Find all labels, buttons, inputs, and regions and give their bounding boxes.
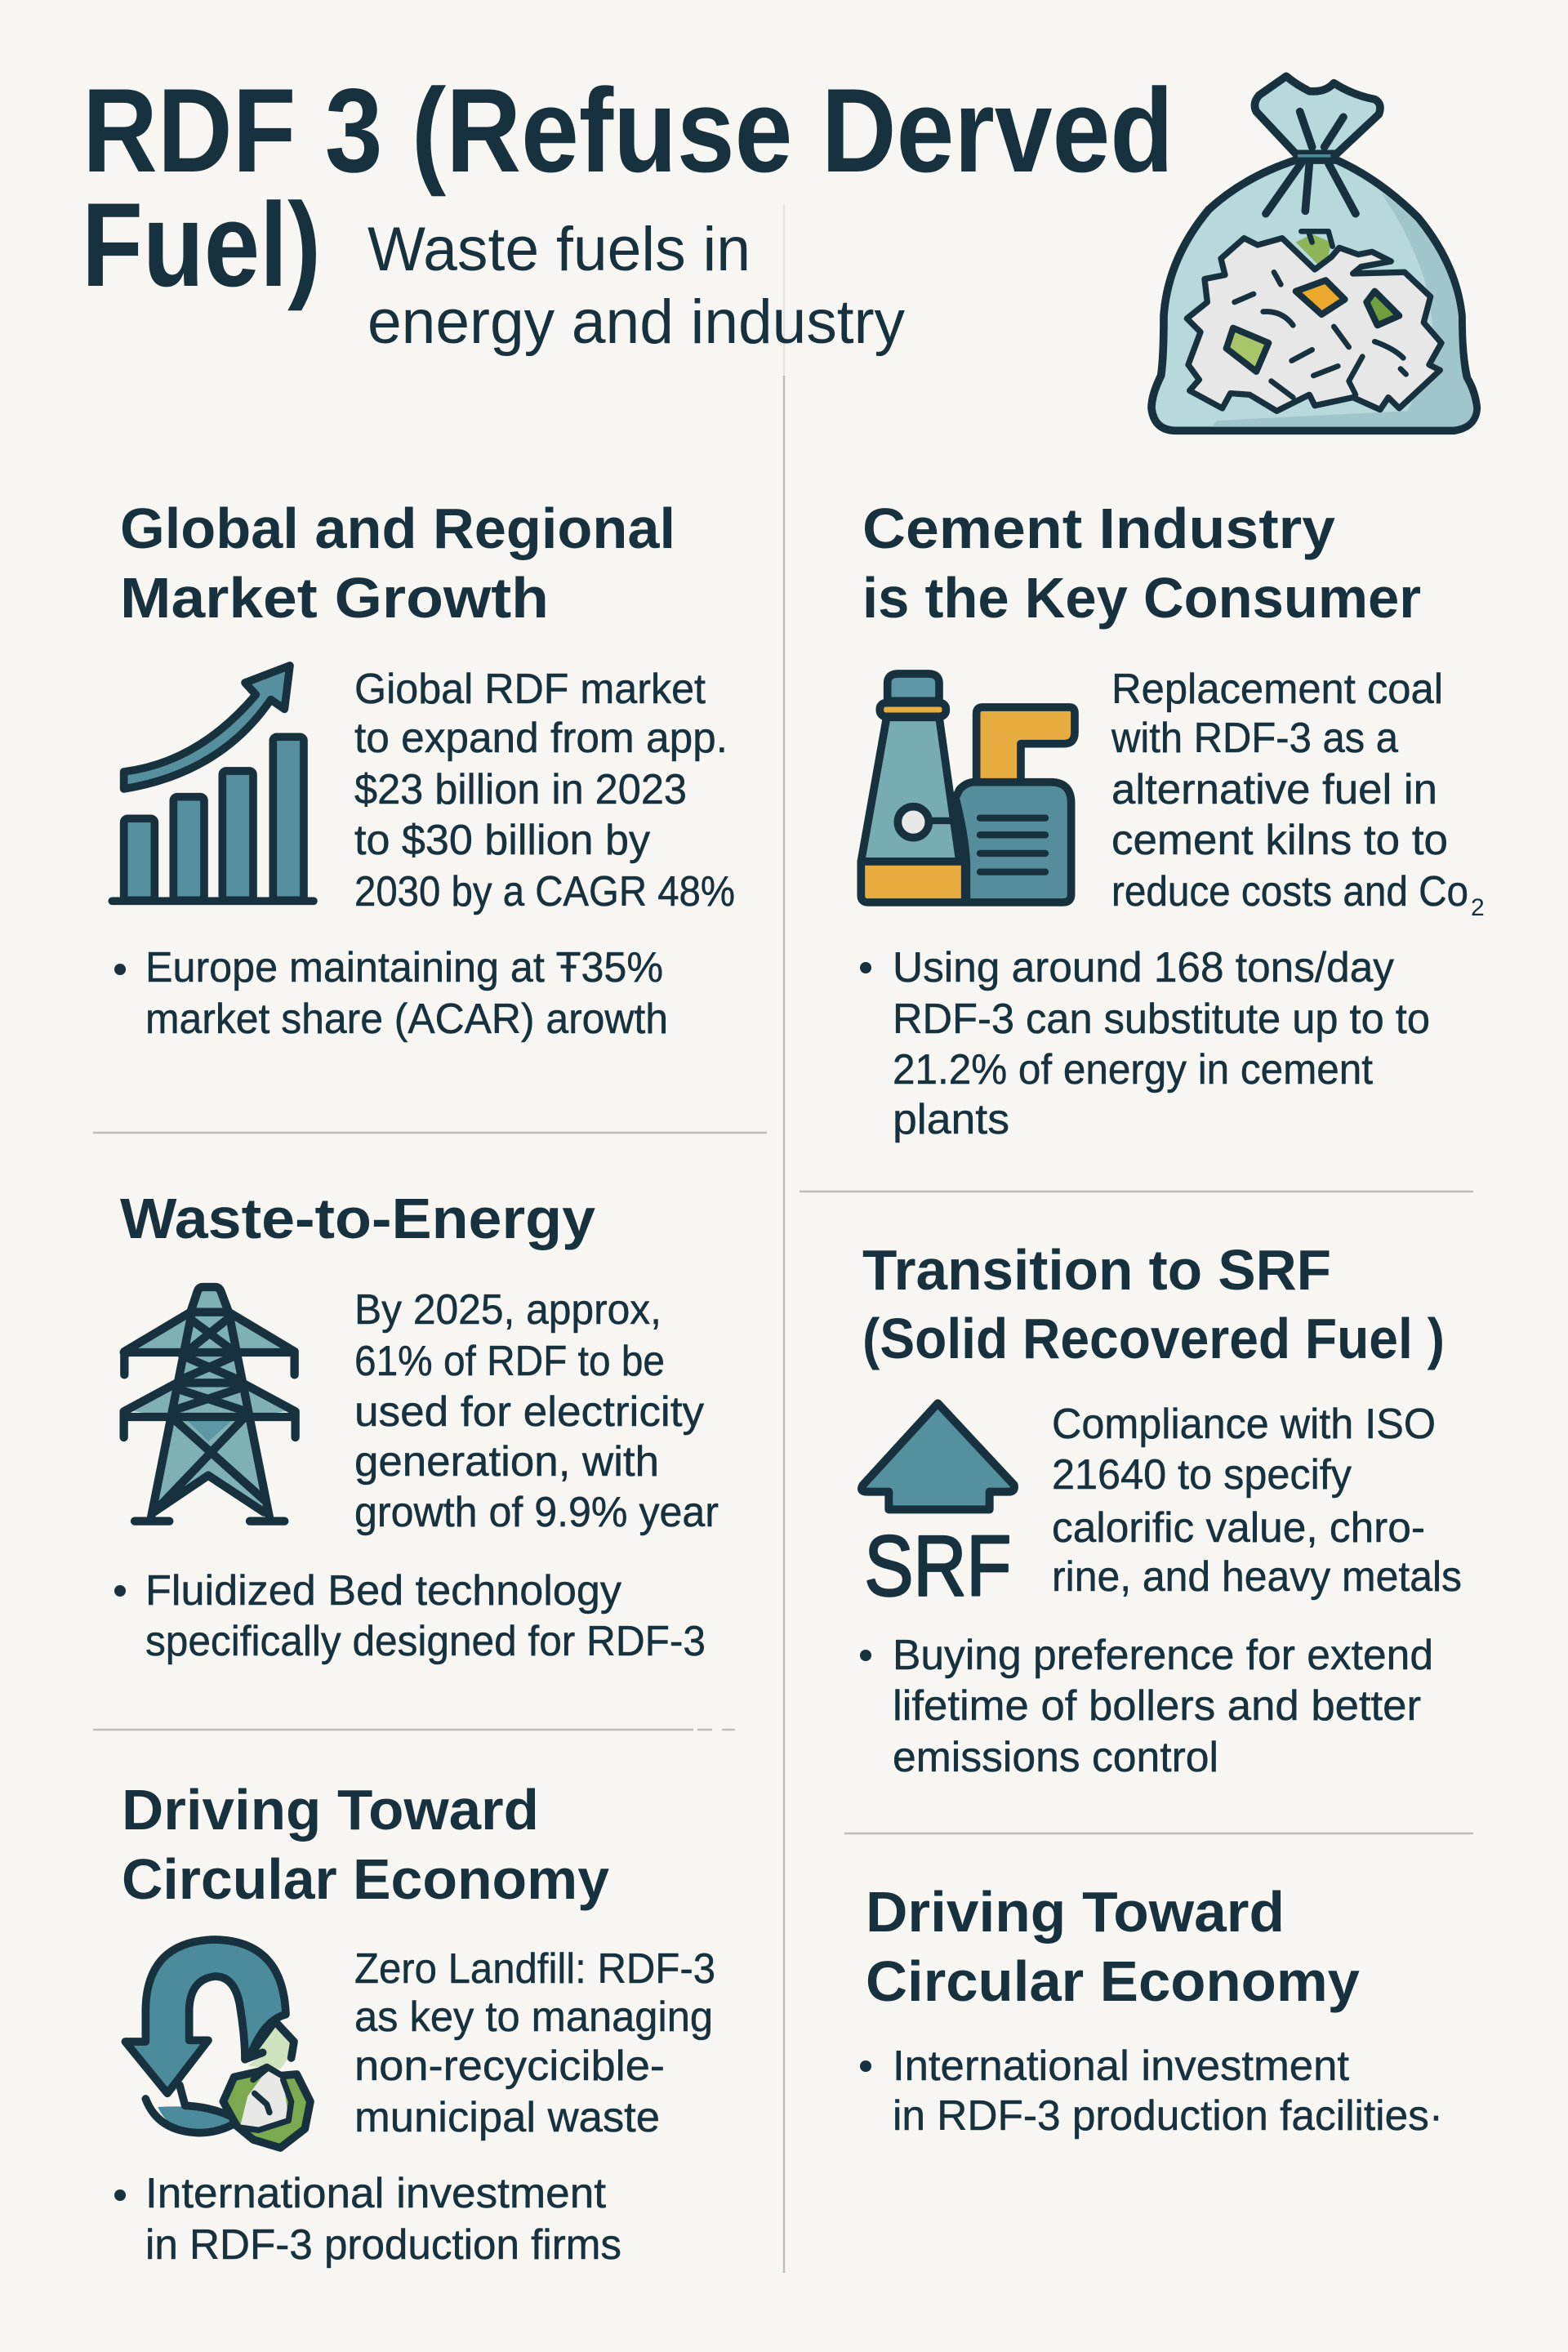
heading: Transition to SRF bbox=[862, 1238, 1331, 1302]
panel: waste-to-energy bbox=[114, 1187, 719, 1665]
title bbox=[82, 64, 1174, 311]
title: Fuel) bbox=[82, 178, 321, 311]
heading bbox=[862, 497, 1421, 630]
title: RDF 3 (Refuse Derved bbox=[82, 64, 1174, 197]
bullet: RDF-3 can substitute up to to bbox=[893, 996, 1430, 1043]
icon: waste bag bbox=[1152, 76, 1477, 430]
body text: rine, and heavy metals bbox=[1052, 1553, 1462, 1601]
bullet: Fluidized Bed technology bbox=[145, 1567, 621, 1615]
bullet bbox=[114, 2170, 621, 2269]
body text bbox=[354, 1286, 719, 1536]
body text: Giobal RDF market bbox=[354, 666, 706, 713]
heading: Circular Economy bbox=[866, 1949, 1360, 2013]
body text: 21640 to specify bbox=[1052, 1451, 1352, 1499]
body text bbox=[1111, 666, 1485, 921]
body text: Compliance with ISO bbox=[1052, 1401, 1436, 1448]
heading: Cement Industry bbox=[862, 497, 1335, 560]
body text bbox=[1052, 1401, 1462, 1601]
panel: driving toward circular economy (right) bbox=[860, 1880, 1443, 2140]
bullet: market share (ACAR) arowth bbox=[145, 996, 668, 1043]
bullet: 21.2% of energy in cement bbox=[893, 1046, 1374, 1094]
body text: alternative fuel in bbox=[1111, 766, 1437, 813]
heading bbox=[120, 497, 675, 630]
bullet: Europe maintaining at Ŧ35% bbox=[145, 944, 663, 991]
subtitle bbox=[368, 215, 905, 357]
panel: global and regional market growth bbox=[112, 497, 735, 1043]
heading: Driving Toward bbox=[122, 1778, 539, 1842]
body text: used for electricity bbox=[354, 1388, 704, 1436]
icon: SRF up arrow: SRF bbox=[864, 1518, 1011, 1614]
subtitle: energy and industry bbox=[368, 287, 905, 357]
subtitle: Waste fuels in bbox=[368, 215, 751, 284]
bullet: Buying preference for extend bbox=[893, 1632, 1433, 1679]
heading bbox=[862, 1238, 1445, 1370]
body text: as key to managing bbox=[354, 1993, 713, 2041]
body text: growth of 9.9% year bbox=[354, 1489, 719, 1536]
icon: growth bar chart with arrow bbox=[112, 666, 314, 901]
body text: $23 billion in 2023 bbox=[354, 766, 687, 813]
body text: Zero Landfill: RDF-3 bbox=[354, 1945, 715, 1993]
bullet bbox=[860, 1632, 1433, 1781]
body text: with RDF-3 as a bbox=[1111, 715, 1398, 762]
panel: transition to SRF bbox=[860, 1238, 1462, 1781]
bullet bbox=[114, 944, 668, 1043]
bullet: International investment bbox=[893, 2042, 1350, 2090]
bullet: in RDF-3 production facilities· bbox=[893, 2092, 1443, 2140]
body text: calorific value, chro- bbox=[1052, 1504, 1425, 1552]
body text bbox=[354, 1945, 715, 2141]
body text: cement kilns to to bbox=[1111, 817, 1448, 864]
bullet: plants bbox=[893, 1096, 1009, 1143]
body text: municipal waste bbox=[354, 2094, 660, 2141]
icon: SRF up arrow bbox=[862, 1403, 1014, 1614]
body text: Replacement coal bbox=[1111, 666, 1443, 713]
bullet: emissions control bbox=[893, 1734, 1218, 1781]
body text: generation, with bbox=[354, 1438, 659, 1486]
panel: cement industry bbox=[860, 497, 1485, 1143]
bullet: specifically designed for RDF-3 bbox=[145, 1618, 706, 1665]
heading: Waste-to-Energy bbox=[120, 1187, 595, 1250]
icon: cement plant bbox=[861, 674, 1075, 902]
body text bbox=[354, 666, 735, 915]
bullet bbox=[114, 1567, 706, 1665]
body text: to expand from app. bbox=[354, 715, 728, 762]
bullet: in RDF-3 production firms bbox=[145, 2221, 621, 2269]
heading: Market Growth bbox=[120, 566, 549, 630]
body text: reduce costs and Co bbox=[1111, 868, 1468, 915]
bullet bbox=[860, 2042, 1443, 2140]
heading: Global and Regional bbox=[120, 497, 675, 560]
bullet: International investment bbox=[145, 2170, 607, 2217]
bullet bbox=[860, 944, 1430, 1143]
heading: Driving Toward bbox=[866, 1880, 1285, 1944]
heading: Circular Economy bbox=[122, 1847, 609, 1911]
body text: to $30 billion by bbox=[354, 817, 650, 864]
heading bbox=[122, 1778, 609, 1911]
body text: 2030 by a CAGR 48% bbox=[354, 868, 735, 915]
panel: driving toward circular economy (left) bbox=[114, 1778, 715, 2269]
body text: non-recycicible- bbox=[354, 2042, 665, 2090]
body text: 61% of RDF to be bbox=[354, 1338, 665, 1385]
body text: 2 bbox=[1471, 894, 1485, 921]
body text: By 2025, approx, bbox=[354, 1286, 662, 1334]
heading: (Solid Recovered Fuel ) bbox=[862, 1307, 1445, 1370]
heading: is the Key Consumer bbox=[862, 566, 1421, 630]
icon: transmission tower bbox=[124, 1287, 296, 1521]
bullet: lifetime of bollers and better bbox=[893, 1682, 1421, 1730]
heading bbox=[866, 1880, 1360, 2013]
bullet: Using around 168 tons/day bbox=[893, 944, 1394, 991]
icon: circular arrow with recycling bbox=[125, 1940, 310, 2148]
